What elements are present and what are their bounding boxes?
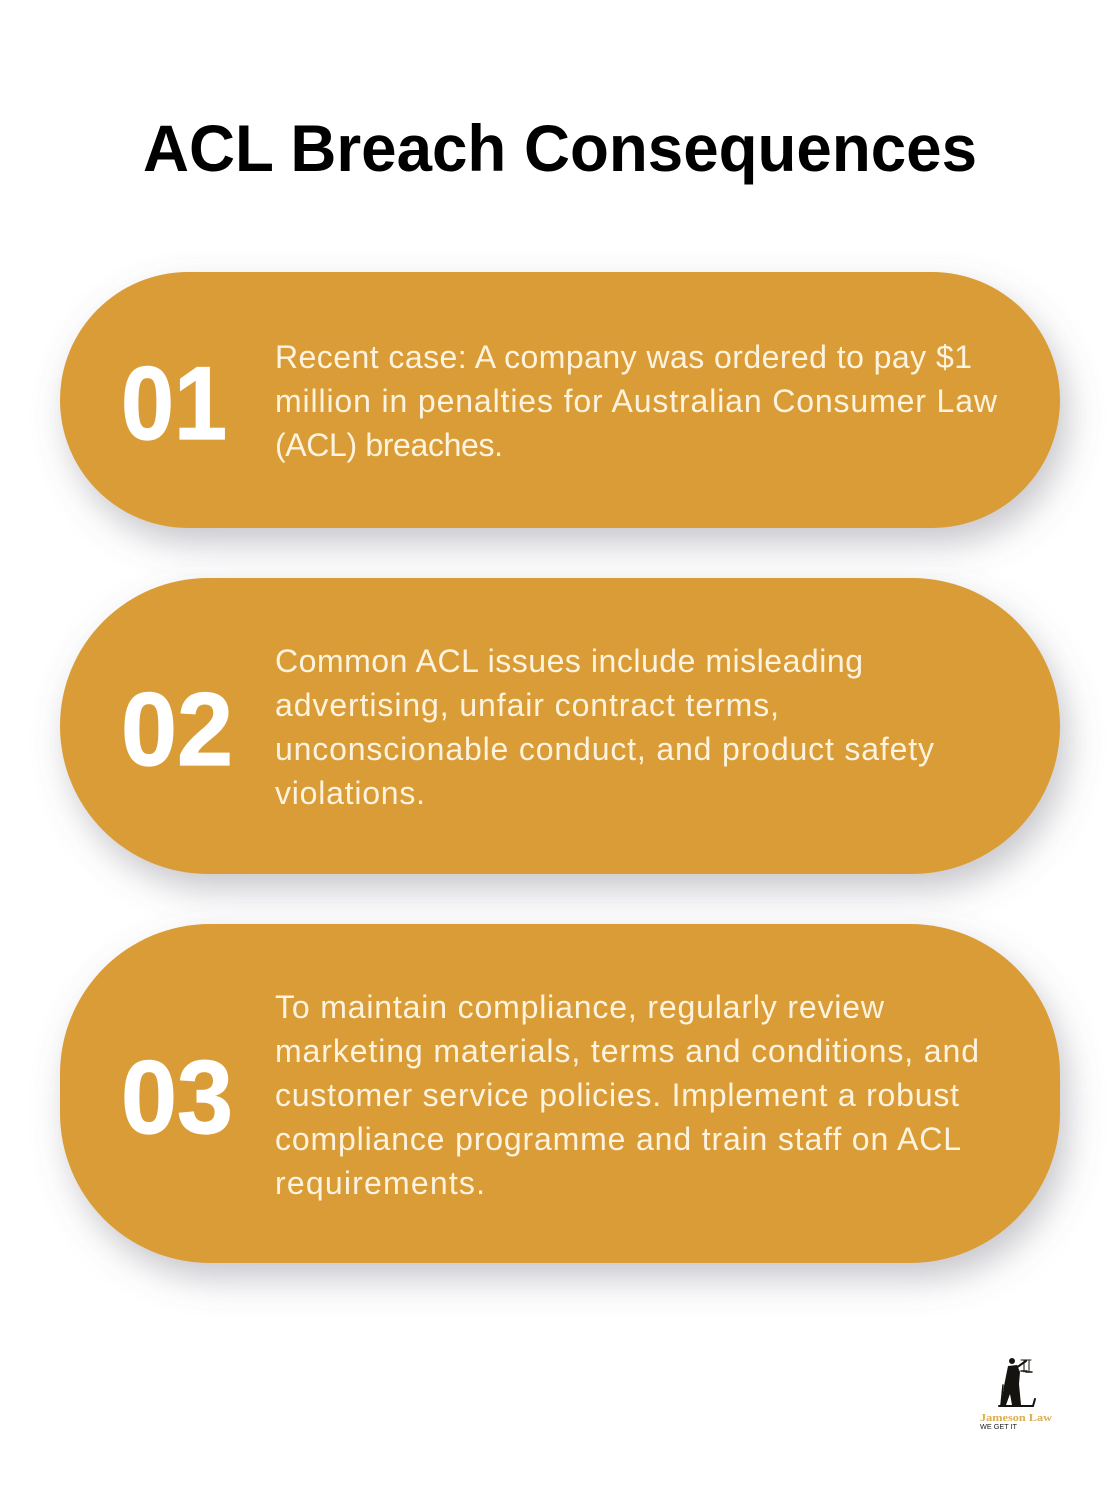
text: maintain compliance: marketing materials, terms and conditions, and	[275, 1033, 979, 1069]
text: recent case: Recent case: A company was ordered to pay $1	[275, 339, 972, 375]
panel: consequence 01	[60, 272, 1068, 544]
text: maintain compliance: customer service policies. Implement a robust	[275, 1077, 959, 1113]
text: recent case: (ACL) breaches.	[275, 427, 503, 463]
number 01: 01	[121, 346, 227, 462]
logo: Jameson Law	[980, 1358, 1052, 1431]
text: common issues: advertising, unfair contract terms,	[275, 687, 779, 723]
text: recent case: million in penalties for Australian Consumer Law	[275, 383, 998, 419]
text: common issues: unconscionable conduct, and product safety	[275, 731, 934, 767]
title: ACL Breach Consequences	[143, 111, 977, 185]
icon: lady justice	[999, 1358, 1035, 1406]
text: maintain compliance: requirements.	[275, 1165, 485, 1201]
text: maintain compliance: To maintain compliance, regularly review	[275, 989, 885, 1025]
text: maintain compliance: compliance programme and train staff on ACL	[275, 1121, 961, 1157]
text: maintain compliance	[275, 989, 979, 1201]
text: common issues	[275, 643, 934, 811]
panel: consequence 03	[60, 924, 1068, 1279]
number 03: 03	[121, 1040, 233, 1156]
text: common issues: Common ACL issues include misleading	[275, 643, 863, 679]
text: common issues: violations.	[275, 775, 425, 811]
panel: consequence 02	[60, 578, 1068, 890]
text: recent case	[275, 339, 998, 463]
number 02: 02	[121, 672, 233, 788]
text: tagline: WE GET IT	[980, 1424, 1018, 1431]
text: brand name: Jameson Law	[980, 1412, 1052, 1424]
